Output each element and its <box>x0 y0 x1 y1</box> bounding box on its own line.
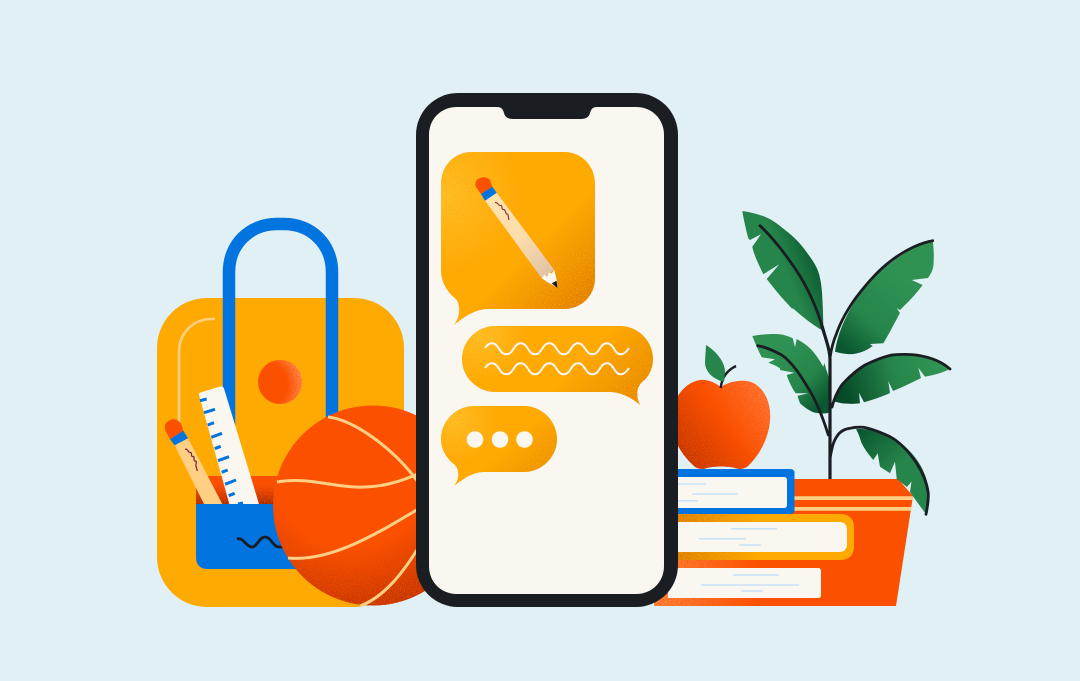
plant stem <box>822 325 830 479</box>
pocket squiggle <box>237 537 285 547</box>
chat bubble: typing dots <box>441 406 557 486</box>
wavy text lines <box>485 343 629 374</box>
basketball seams <box>277 417 420 606</box>
chat bubble: pencil <box>441 152 595 325</box>
yellow book <box>660 514 854 560</box>
typing dots <box>467 431 533 448</box>
leaf: lower right <box>830 427 928 514</box>
plant <box>742 211 950 514</box>
backpack body <box>157 298 404 607</box>
phone screen with notch <box>429 107 664 594</box>
apple <box>671 345 770 469</box>
leaf: middle right <box>832 354 950 407</box>
pencil icon <box>475 177 557 288</box>
pocket <box>196 504 320 569</box>
blue book <box>660 469 794 514</box>
plant pot <box>660 479 913 606</box>
chat bubble: message lines <box>462 326 653 405</box>
apple body <box>671 380 770 469</box>
backpack highlight line <box>179 319 215 422</box>
backpack handle <box>229 224 332 430</box>
basketball <box>273 406 473 606</box>
orange book <box>654 560 822 606</box>
phone frame <box>416 93 678 607</box>
phone <box>416 93 678 607</box>
backpack <box>157 224 404 607</box>
small pencil <box>165 419 223 506</box>
stack of books and plant pot <box>654 469 913 606</box>
backpack button <box>258 360 302 404</box>
apple leaf <box>705 345 725 382</box>
leaf: top right <box>830 241 934 358</box>
leaf: middle left <box>752 334 830 435</box>
ruler <box>199 386 259 510</box>
pocket interior <box>196 476 330 506</box>
apple stem <box>721 366 736 388</box>
leaf: top left <box>742 211 823 331</box>
